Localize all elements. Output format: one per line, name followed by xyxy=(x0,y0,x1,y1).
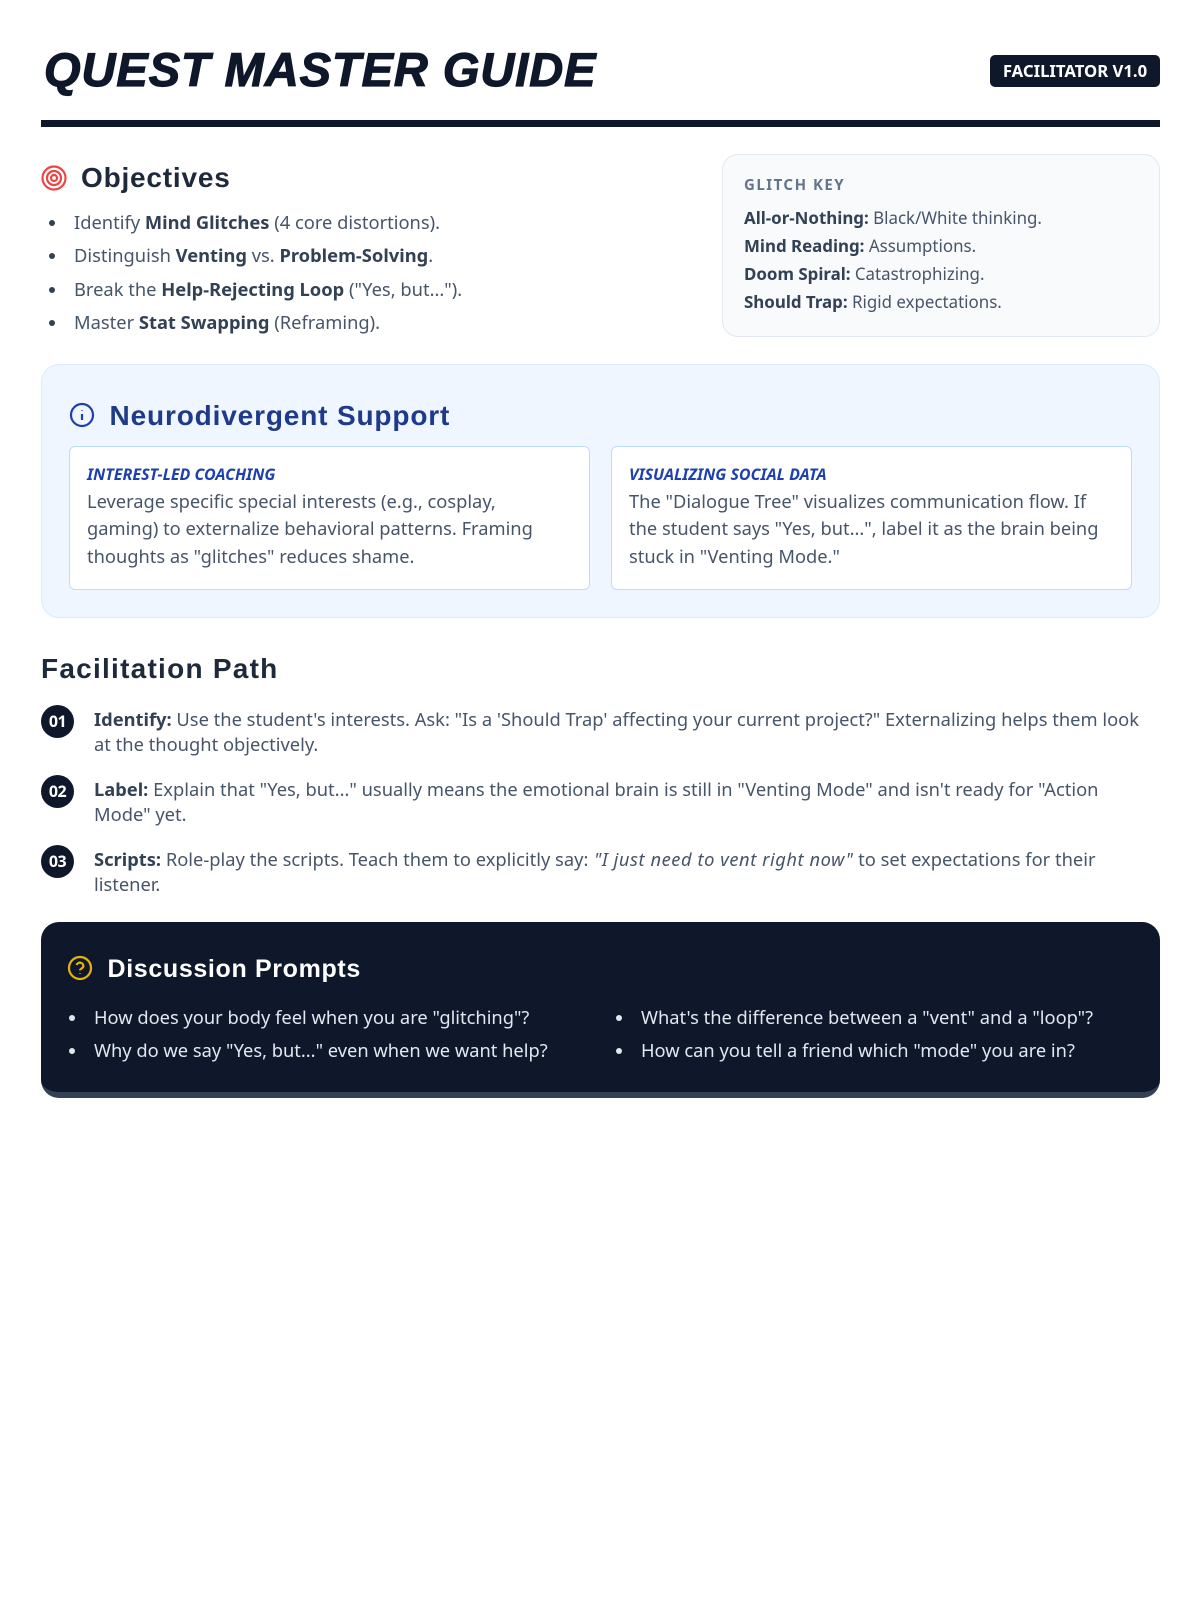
heading: discussion prompts: Discussion Prompts xyxy=(108,955,361,983)
badge: facilitator version xyxy=(990,55,1160,87)
icon: target xyxy=(41,165,67,191)
glitch key definitions: Should Trap: Rigid expectations. xyxy=(744,290,1002,313)
objectives list: Distinguish Venting vs. Problem-Solving. xyxy=(74,243,433,268)
header rule xyxy=(41,120,1160,127)
card text: thoughts as "glitches" reduces shame. xyxy=(87,544,414,569)
badge: facilitator version: FACILITATOR V1.0 xyxy=(1003,59,1147,82)
card text: the student says "Yes, but...", label it as the brain being xyxy=(629,516,1098,541)
prompts left column xyxy=(69,1004,548,1062)
card text xyxy=(629,489,1098,569)
prompts right column: How can you tell a friend which "mode" you are in? xyxy=(641,1038,1075,1062)
card title: VISUALIZING SOCIAL DATA xyxy=(629,463,827,485)
objectives list: Break the Help-Rejecting Loop ("Yes, but..."). xyxy=(74,277,462,302)
card: interest-led coaching xyxy=(69,446,590,590)
heading: facilitation path: Facilitation Path xyxy=(41,653,278,684)
step number 03 xyxy=(41,845,74,878)
panel: glitch key xyxy=(722,154,1160,337)
objectives list: Identify Mind Glitches (4 core distortions). xyxy=(74,210,440,235)
step text: Identify: Use the student's interests. Ask: "Is a 'Should Trap' affecting your current project?" Externalizing helps them look xyxy=(94,706,1139,732)
icon: info xyxy=(70,402,94,428)
glitch key definitions: All-or-Nothing: Black/White thinking. xyxy=(744,206,1042,228)
glitch key definitions xyxy=(744,206,1042,313)
glitch key heading: GLITCH KEY xyxy=(744,174,845,194)
glitch key definitions: Doom Spiral: Catastrophizing. xyxy=(744,262,984,285)
card text: gaming) to externalize behavioral patterns. Framing xyxy=(87,516,533,541)
heading: objectives: Objectives xyxy=(81,162,231,193)
step number 02: 02 xyxy=(49,780,66,802)
objectives list xyxy=(49,210,462,335)
step text: Scripts: Role-play the scripts. Teach them to explicitly say: "I just need to vent right now" to set expectations for their xyxy=(94,846,1096,872)
step 03 xyxy=(41,845,1096,896)
card text: Leverage specific special interests (e.g., cosplay, xyxy=(87,489,496,514)
card: visualizing social data xyxy=(611,446,1132,590)
panel: neurodivergent support xyxy=(41,364,1160,618)
glitch key definitions: Mind Reading: Assumptions. xyxy=(744,234,976,257)
objectives list: Master Stat Swapping (Reframing). xyxy=(74,310,380,335)
step text xyxy=(94,846,1096,896)
step text xyxy=(94,776,1098,826)
step 01 xyxy=(41,705,1139,756)
card text: The "Dialogue Tree" visualizes communication flow. If xyxy=(629,489,1086,514)
icon: question xyxy=(68,956,92,980)
prompts right column xyxy=(616,1004,1093,1062)
step text: listener. xyxy=(94,872,160,896)
panel: discussion prompts xyxy=(41,922,1160,1098)
prompts left column: Why do we say "Yes, but..." even when we want help? xyxy=(94,1038,548,1062)
card title: INTEREST-LED COACHING xyxy=(87,463,275,485)
heading: neurodivergent support: Neurodivergent Support xyxy=(110,400,450,430)
step number 01: 01 xyxy=(49,710,66,732)
card text: stuck in "Venting Mode." xyxy=(629,544,840,569)
step 02 xyxy=(41,775,1098,826)
prompts right column: What's the difference between a "vent" and a "loop"? xyxy=(641,1004,1093,1030)
step text xyxy=(94,706,1139,756)
step number 02 xyxy=(41,775,74,808)
step number 01 xyxy=(41,705,74,738)
title: QUEST MASTER GUIDE xyxy=(44,43,596,96)
card text xyxy=(87,489,533,569)
panel: objectives xyxy=(41,162,462,335)
prompts left column: How does your body feel when you are "glitching"? xyxy=(94,1004,529,1030)
step text: Mode" yet. xyxy=(94,802,187,826)
step text: Label: Explain that "Yes, but..." usually means the emotional brain is still in "Venting Mode" and isn't ready for "Action xyxy=(94,776,1098,802)
step text: at the thought objectively. xyxy=(94,732,318,756)
step number 03: 03 xyxy=(49,850,66,872)
